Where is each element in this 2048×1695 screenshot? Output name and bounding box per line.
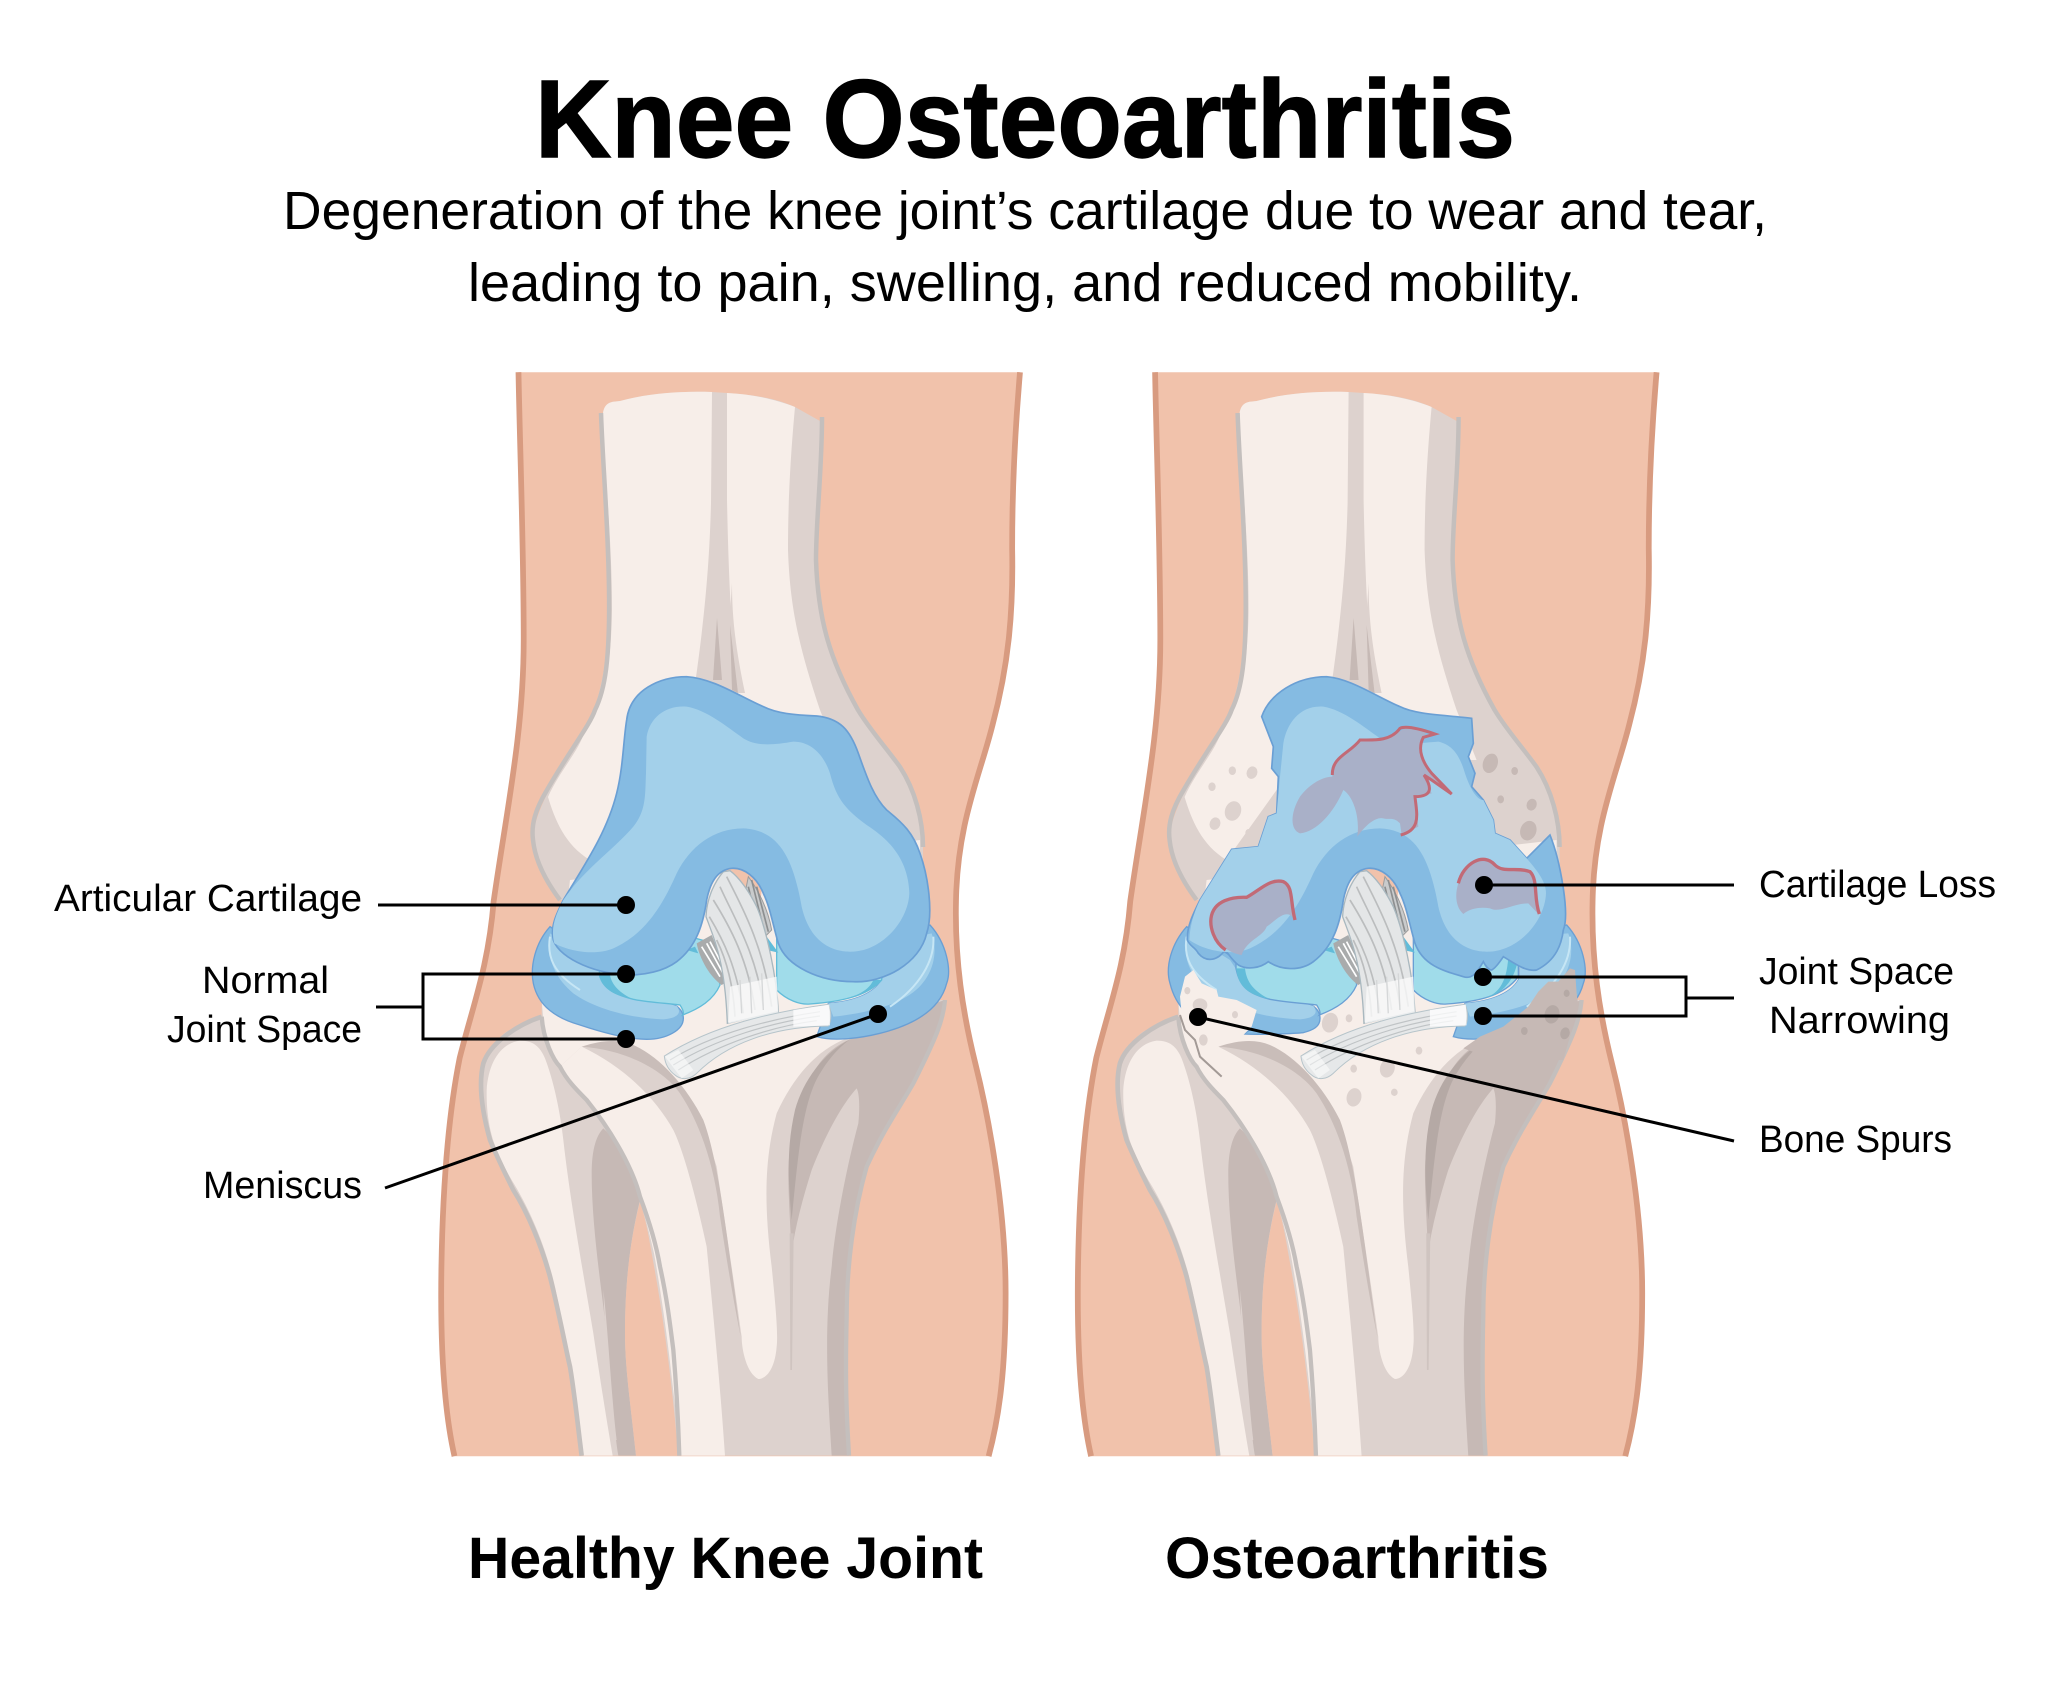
caption: osteoarthritis: Osteoarthritis (1165, 1526, 1549, 1591)
subtitle: leading to pain, swelling, and reduced mobility. (468, 253, 1582, 313)
label: bone spurs: Bone Spurs (1759, 1119, 1952, 1161)
bone spur and crack (1180, 970, 1257, 1077)
subtitle (283, 181, 1767, 313)
damaged femoral cartilage (1187, 677, 1565, 977)
knee panel: healthy knee joint (441, 372, 1020, 1456)
label: cartilage loss (1475, 864, 1996, 906)
title: Knee Osteoarthritis (535, 58, 1515, 181)
label: joint space narrowing: Narrowing (1769, 1000, 1950, 1042)
label: normal joint space (167, 960, 635, 1051)
bone spots (1208, 751, 1539, 1108)
label: joint space narrowing (1474, 951, 1954, 1042)
ligaments (664, 868, 831, 1079)
leg: skin and bones (441, 372, 1020, 1456)
label: articular cartilage (54, 878, 635, 920)
femoral articular cartilage (552, 677, 930, 982)
subtitle: Degeneration of the knee joint’s cartilage due to wear and tear, (283, 181, 1767, 241)
label: joint space narrowing: Joint Space (1759, 951, 1954, 993)
meniscus and joint space (532, 925, 949, 1039)
cartilage loss patches (1211, 727, 1539, 955)
label: meniscus: Meniscus (203, 1165, 362, 1207)
caption: healthy knee joint: Healthy Knee Joint (468, 1526, 983, 1591)
label: articular cartilage: Articular Cartilage (54, 878, 362, 920)
label: bone spurs (1189, 1008, 1952, 1161)
label: cartilage loss: Cartilage Loss (1759, 864, 1996, 906)
label: meniscus (203, 1005, 887, 1207)
label: normal joint space: Joint Space (167, 1009, 362, 1051)
worn tibia patch (1463, 968, 1578, 1060)
label: normal joint space: Normal (202, 960, 329, 1002)
leg: skin and bones (1078, 372, 1657, 1456)
knee panel: osteoarthritis (1078, 372, 1657, 1456)
ligaments (1301, 868, 1467, 1079)
meniscus and joint space (1168, 925, 1585, 1039)
